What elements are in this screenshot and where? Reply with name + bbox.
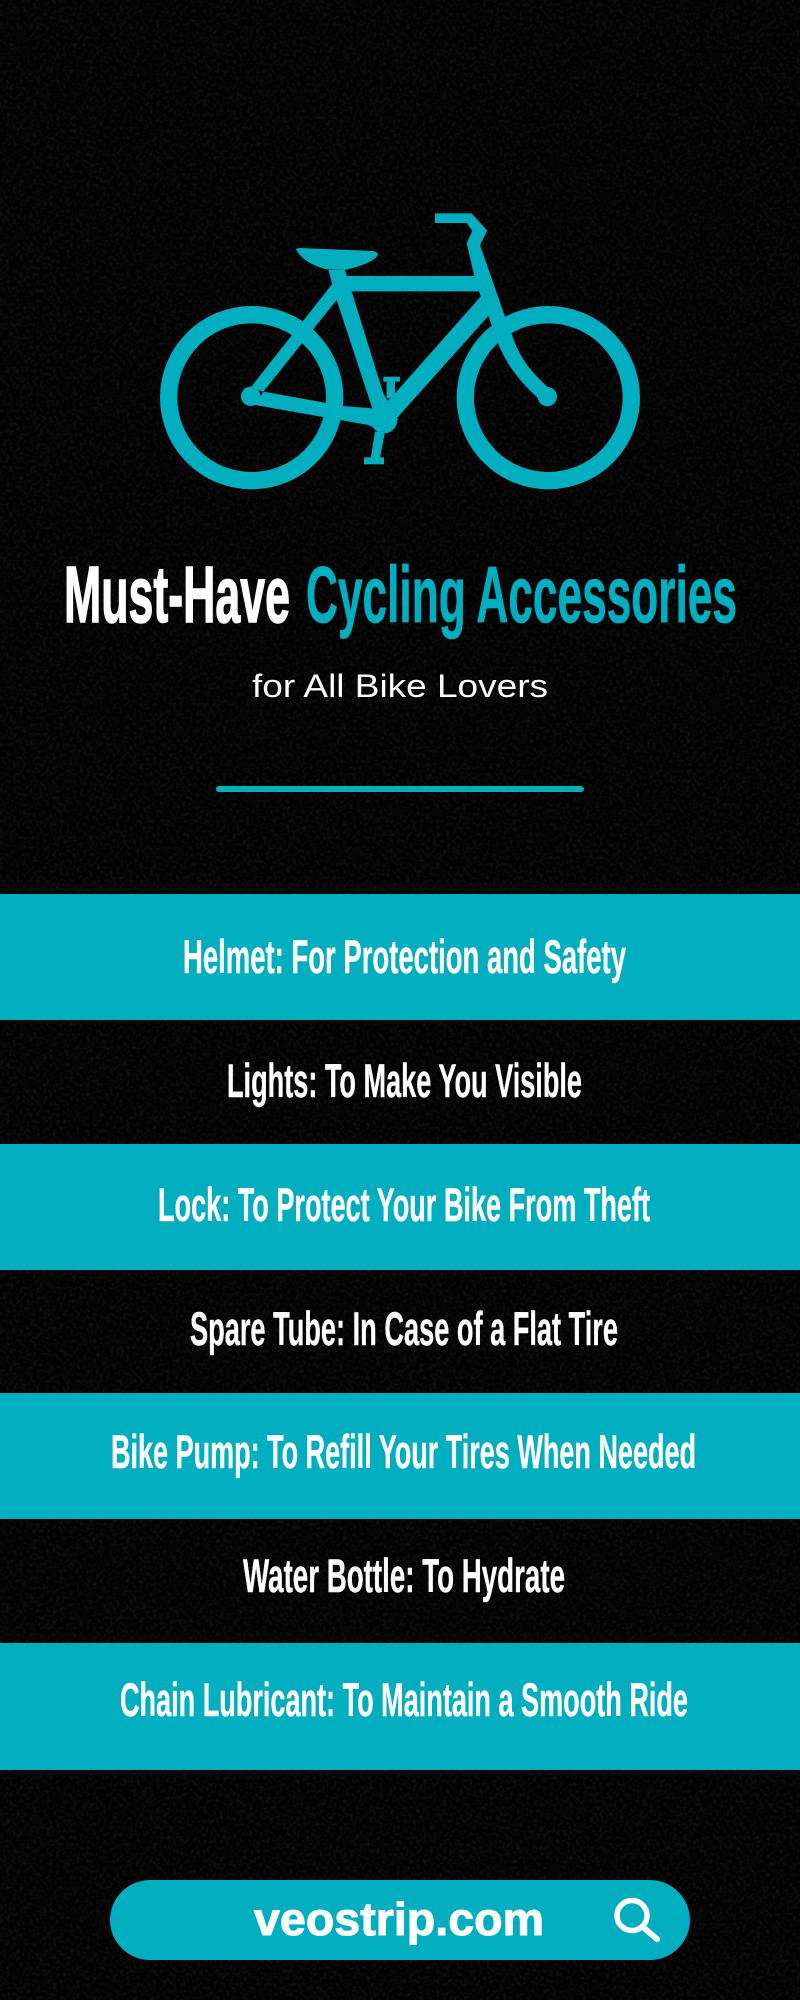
title: Must-Have [64, 550, 290, 639]
list item 1: helmet [0, 894, 800, 1020]
list item 7: chain lubricant [0, 1643, 800, 1770]
divider line [216, 786, 584, 792]
website url: veostrip.com [254, 1893, 544, 1945]
list item 5: bike pump [0, 1393, 800, 1519]
list item 3: lock [0, 1144, 800, 1270]
website search bar [110, 1880, 690, 1960]
title [64, 550, 737, 639]
icon: bicycle [169, 213, 631, 481]
subtitle: for All Bike Lovers [252, 668, 548, 704]
list item 6: water bottle: Water Bottle: To Hydrate [243, 1549, 565, 1602]
icon: magnifying glass [617, 1900, 657, 1939]
